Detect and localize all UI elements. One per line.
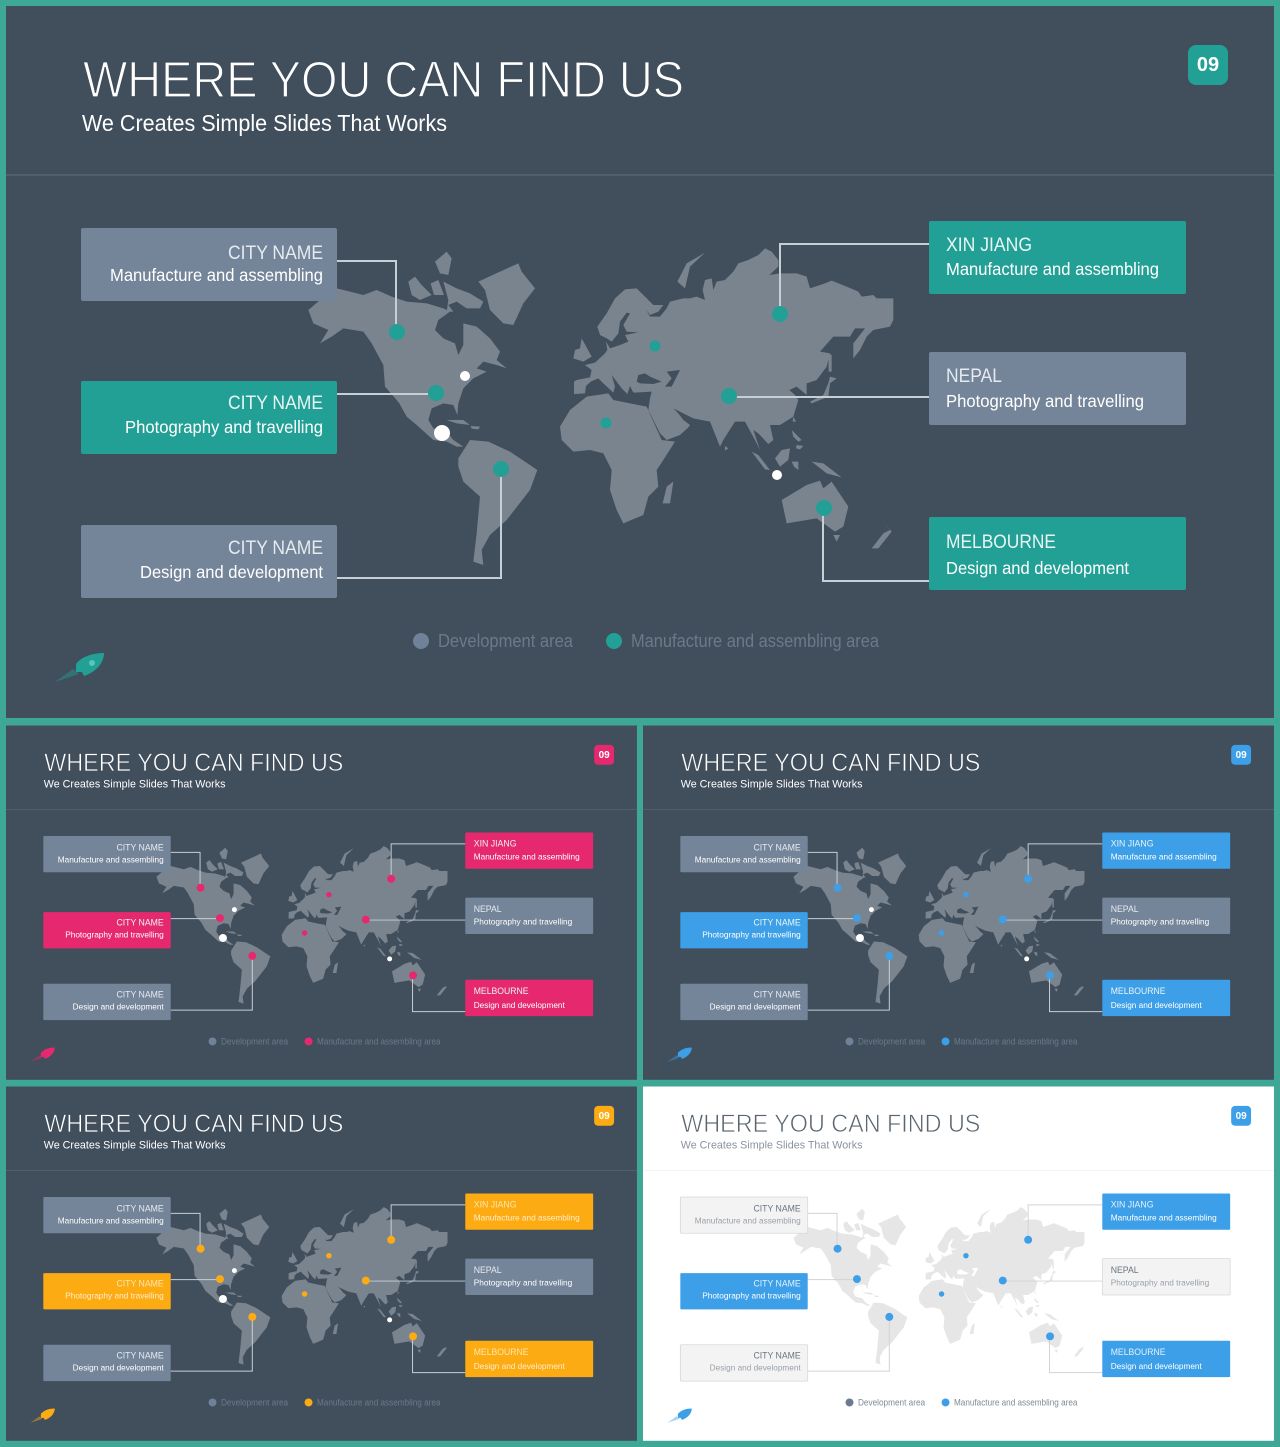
callout: nepal [1102,1259,1230,1295]
callout: city name photography: Photography and travelling [125,417,323,437]
callout: city name design [43,1345,171,1381]
connector lines [171,1205,465,1373]
callout: city name design: CITY NAME [116,1351,164,1362]
subtitle: We Creates Simple Slides That Works [681,1140,863,1152]
callout: city name manufacture: Manufacture and assembling [58,1215,164,1225]
title: WHERE YOU CAN FIND US [44,1110,343,1138]
legend: Development area [221,1036,288,1046]
callout: city name photography [680,1273,808,1309]
callout: nepal [465,1259,593,1295]
world map [308,248,893,565]
callout: nepal: NEPAL [474,1265,502,1276]
callout: city name manufacture: CITY NAME [753,1203,801,1214]
subtitle: We Creates Simple Slides That Works [44,779,226,791]
legend: Development area [858,1036,925,1046]
callout: xin jiang: Manufacture and assembling [1111,851,1217,861]
world map [156,1207,448,1365]
map markers [197,875,417,979]
callout: xin jiang: XIN JIANG [1111,838,1154,849]
callout: xin jiang: Manufacture and assembling [946,259,1159,279]
callout: city name design: CITY NAME [228,538,323,559]
callout: nepal: NEPAL [946,366,1002,387]
subtitle: We Creates Simple Slides That Works [44,1140,226,1152]
callout: city name manufacture [81,228,337,301]
legend: Manufacture and assembling area [954,1397,1077,1407]
legend: Manufacture and assembling area [954,1036,1077,1046]
callout: nepal: NEPAL [1111,904,1139,915]
callout: nepal: Photography and travelling [474,917,572,927]
callout: melbourne: Design and development [1111,1000,1202,1010]
callout: nepal: NEPAL [1111,1265,1139,1276]
callout: melbourne: Design and development [1111,1361,1202,1371]
subtitle: We Creates Simple Slides That Works [82,110,447,136]
world map [793,1207,1085,1365]
callout: xin jiang: XIN JIANG [946,235,1032,256]
callout: city name photography [43,1273,171,1309]
callout: nepal: Photography and travelling [1111,1278,1209,1288]
callout: city name photography: Photography and travelling [65,929,164,939]
callout: melbourne: Design and development [946,558,1129,578]
callout: city name photography [81,381,337,454]
map markers [389,306,832,516]
callout: city name manufacture [680,836,808,872]
callout: melbourne [465,1341,593,1377]
callout: nepal: Photography and travelling [946,391,1144,411]
callout: city name photography: Photography and travelling [702,929,801,939]
page badge [1231,1106,1251,1126]
callout: nepal [929,352,1186,425]
page badge: 09 [1236,1111,1247,1122]
legend: Manufacture and assembling area [631,631,880,651]
callout: city name photography: CITY NAME [753,918,801,929]
callout: melbourne: MELBOURNE [474,1347,528,1358]
callout: city name photography: CITY NAME [116,918,164,929]
callout: city name design [680,984,808,1020]
callout: city name photography: Photography and travelling [65,1290,164,1300]
world map [793,846,1085,1004]
callout: city name design: Design and development [73,1002,164,1012]
callout: xin jiang [465,832,593,869]
icon: rocket [30,1408,55,1423]
legend [846,1036,1077,1046]
callout: city name photography: CITY NAME [753,1279,801,1290]
page badge [594,1106,614,1126]
callout: city name design: CITY NAME [753,990,801,1001]
callout: nepal [1102,898,1230,934]
callout: xin jiang [1102,832,1230,869]
callout: nepal: Photography and travelling [474,1278,572,1288]
page badge [1231,745,1251,765]
callout: city name manufacture: CITY NAME [116,842,164,853]
slide: blue variant [643,726,1274,1080]
connector lines [808,844,1102,1012]
callout: city name manufacture: CITY NAME [116,1203,164,1214]
callout: city name design: CITY NAME [753,1351,801,1362]
icon: rocket [55,653,104,682]
map markers [197,1236,417,1340]
callout: city name manufacture: Manufacture and assembling [58,854,164,864]
page badge: 09 [1197,54,1219,76]
legend [209,1397,440,1407]
callout: city name photography [43,912,171,948]
callout: city name manufacture [43,836,171,872]
callout: city name manufacture: Manufacture and assembling [695,1215,801,1225]
title: WHERE YOU CAN FIND US [681,1110,980,1138]
callout: melbourne: Design and development [474,1361,565,1371]
legend: Manufacture and assembling area [317,1036,440,1046]
callout: city name photography: CITY NAME [228,393,323,414]
callout: city name manufacture [43,1197,171,1233]
callout: city name design: Design and development [140,562,323,582]
callout: xin jiang: XIN JIANG [474,838,517,849]
connector lines [337,244,929,581]
callout: melbourne: Design and development [474,1000,565,1010]
callout: melbourne: MELBOURNE [1111,986,1165,997]
callout: city name photography [680,912,808,948]
title: WHERE YOU CAN FIND US [681,749,980,777]
icon: rocket [30,1047,55,1062]
callout: melbourne [929,517,1186,590]
connector lines [171,844,465,1012]
legend: Development area [221,1397,288,1407]
page badge [1188,45,1228,85]
callout: xin jiang [1102,1193,1230,1230]
callout: city name manufacture: Manufacture and assembling [695,854,801,864]
callout: melbourne: MELBOURNE [1111,1347,1165,1358]
callout: melbourne: MELBOURNE [946,532,1056,553]
slide: pink variant [6,726,637,1080]
callout: xin jiang: XIN JIANG [1111,1199,1154,1210]
callout: city name manufacture: CITY NAME [228,243,323,264]
callout: xin jiang: XIN JIANG [474,1199,517,1210]
callout: city name photography: CITY NAME [116,1279,164,1290]
callout: melbourne [1102,1341,1230,1377]
legend [413,631,880,651]
map markers [834,1236,1054,1340]
callout: city name design: Design and development [710,1363,801,1373]
slide: amber variant [6,1086,637,1441]
callout: city name manufacture: Manufacture and assembling [110,265,323,285]
callout: city name manufacture [680,1197,808,1233]
callout: city name photography: Photography and travelling [702,1290,801,1300]
callout: melbourne: MELBOURNE [474,986,528,997]
legend: Manufacture and assembling area [317,1397,440,1407]
callout: city name design: Design and development [710,1002,801,1012]
callout: xin jiang: Manufacture and assembling [474,851,580,861]
legend [209,1036,440,1046]
connector lines [808,1205,1102,1373]
callout: xin jiang [465,1193,593,1230]
page badge: 09 [599,1111,610,1122]
map markers [834,875,1054,979]
callout: city name design [43,984,171,1020]
slide: white variant [643,1086,1274,1441]
callout: nepal: Photography and travelling [1111,917,1209,927]
callout: xin jiang [929,221,1186,294]
callout: city name design [81,525,337,598]
callout: xin jiang: Manufacture and assembling [1111,1212,1217,1222]
legend: Development area [858,1397,925,1407]
callout: nepal [465,898,593,934]
page badge: 09 [1236,750,1247,761]
icon: rocket [667,1408,692,1423]
page badge: 09 [599,750,610,761]
callout: city name design: Design and development [73,1363,164,1373]
callout: melbourne [1102,980,1230,1016]
page badge [594,745,614,765]
callout: xin jiang: Manufacture and assembling [474,1212,580,1222]
title: WHERE YOU CAN FIND US [83,51,684,108]
title: WHERE YOU CAN FIND US [44,749,343,777]
legend: Development area [438,631,574,651]
callout: city name design: CITY NAME [116,990,164,1001]
icon: rocket [667,1047,692,1062]
slide: large teal map slide [6,6,1274,718]
callout: melbourne [465,980,593,1016]
callout: city name design [680,1345,808,1381]
world map [156,846,448,1004]
callout: nepal: NEPAL [474,904,502,915]
subtitle: We Creates Simple Slides That Works [681,779,863,791]
legend [846,1397,1077,1407]
callout: city name manufacture: CITY NAME [753,842,801,853]
